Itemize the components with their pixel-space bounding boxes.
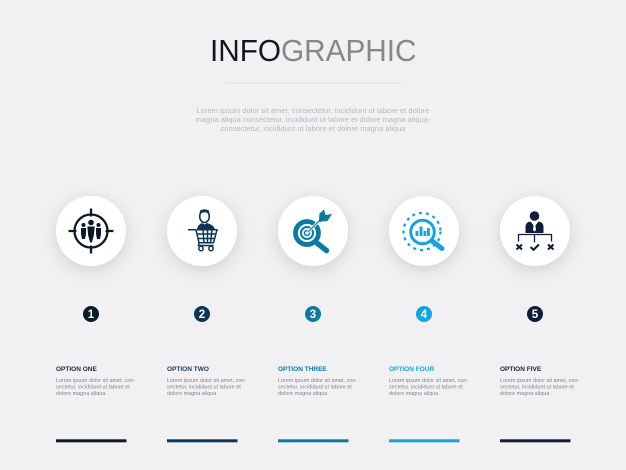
bar 3 (278, 439, 348, 442)
description: consectetur, incididunt ut labore et dolore magna aliqua (220, 124, 406, 133)
option two text: dolore magna aliqua (167, 391, 217, 397)
panel: option two (167, 196, 246, 442)
option five text: Lorem ipsum dolor sit amet, con- (500, 378, 579, 384)
option three text (278, 366, 357, 397)
option one text: OPTION ONE (56, 366, 97, 373)
option one text: Lorem ipsum dolor sit amet, con- (56, 378, 135, 384)
number badge 3 (305, 306, 321, 322)
option one text: sectetur, incididunt ut labore et (56, 384, 130, 390)
bar 2 (167, 439, 238, 442)
option five text: dolore magna aliqua (500, 391, 550, 397)
option five text (500, 366, 579, 397)
number badge 3: 3 (310, 309, 316, 321)
option two text (167, 366, 246, 397)
bar 5 (500, 439, 570, 442)
number badge 1 (83, 306, 99, 322)
number badge 5: 5 (532, 309, 539, 321)
option four text: sectetur, incididunt ut labore et (389, 384, 463, 390)
title: INFOGRAPHIC (210, 34, 416, 68)
number badge 4 (416, 306, 432, 322)
option two text: OPTION TWO (167, 366, 209, 373)
option two text: sectetur, incididunt ut labore et (167, 384, 241, 390)
panel: option four (389, 196, 468, 442)
option four text: Lorem ipsum dolor sit amet, con- (389, 378, 468, 384)
bar 1 (56, 439, 126, 442)
option three text: sectetur, incididunt ut labore et (278, 384, 352, 390)
panel: option five (500, 196, 579, 442)
number badge 2: 2 (199, 309, 205, 321)
option three text: Lorem ipsum dolor sit amet, con- (278, 378, 357, 384)
number badge 4: 4 (421, 309, 428, 321)
option five text: sectetur, incididunt ut labore et (500, 384, 574, 390)
description (196, 106, 431, 133)
option three text: OPTION THREE (278, 366, 327, 373)
option four text: OPTION FOUR (389, 366, 434, 373)
option two text: Lorem ipsum dolor sit amet, con- (167, 378, 246, 384)
option one text: dolore magna aliqua (56, 391, 106, 397)
icon: crosshair on people (56, 196, 126, 266)
option four text (389, 366, 468, 397)
panel: option three (278, 196, 357, 442)
icon: businessman with decision tree (500, 196, 570, 266)
option three text: dolore magna aliqua (278, 391, 328, 397)
bar 4 (389, 439, 460, 442)
icon: magnifier with bar chart (389, 196, 459, 266)
panel: option one (56, 196, 135, 442)
number badge 5 (527, 306, 543, 322)
description: magna aliqua consectetur, incididunt ut labore et dolore magna aliqua- (196, 115, 431, 124)
number badge 1: 1 (88, 309, 95, 321)
icon: person in shopping cart (167, 196, 237, 266)
option five text: OPTION FIVE (500, 366, 542, 373)
option one text (56, 366, 135, 397)
icon: target with dart and magnifier handle (278, 196, 348, 266)
number badge 2 (194, 306, 210, 322)
option four text: dolore magna aliqua (389, 391, 439, 397)
description: Lorem ipsum dolor sit amet, consectetur, incididunt ut labore et dolore (197, 106, 429, 115)
